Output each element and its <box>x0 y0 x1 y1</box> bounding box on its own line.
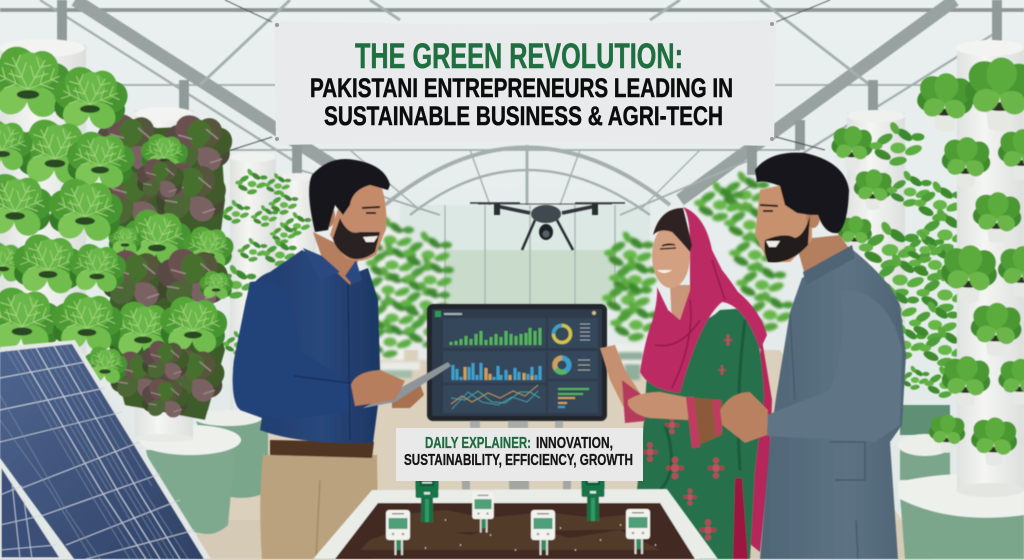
soil bed with sensors <box>313 472 718 559</box>
kurta <box>760 250 906 559</box>
sign: daily explainer: INNOVATION, <box>536 435 613 452</box>
neck <box>795 235 850 275</box>
beard <box>764 215 810 262</box>
hydroponic towers right <box>830 40 1024 559</box>
far greenhouse wall <box>400 205 650 305</box>
drone <box>470 203 625 250</box>
white sensor back <box>472 492 494 532</box>
roof frame <box>0 0 1024 215</box>
tower right <box>915 40 1024 497</box>
title banner <box>274 20 776 146</box>
hands with tablet <box>351 362 451 408</box>
planter small right <box>898 405 952 480</box>
tower right middle <box>830 110 932 343</box>
planter front <box>139 425 241 534</box>
sign: daily explainer <box>396 428 643 481</box>
lettuce <box>92 109 237 421</box>
scarf tail <box>745 340 772 552</box>
arms <box>600 345 722 448</box>
donut chart <box>548 318 598 348</box>
green sensor left <box>416 473 438 522</box>
white sensor one <box>386 510 410 555</box>
planter back <box>194 410 268 498</box>
hands <box>720 392 768 443</box>
green sensor right <box>582 472 604 521</box>
line chart <box>443 385 546 413</box>
climbing plants <box>859 180 971 399</box>
dress <box>637 308 764 559</box>
face <box>330 178 386 261</box>
belt <box>270 440 374 458</box>
neck <box>313 232 360 285</box>
neck <box>670 285 692 325</box>
tablet dashboard <box>427 304 607 428</box>
white planter frame <box>313 489 718 559</box>
second solar panel <box>0 463 62 559</box>
hair <box>653 208 692 252</box>
main solar panel <box>0 340 211 559</box>
collar <box>303 248 362 284</box>
banner heading: THE GREEN REVOLUTION: <box>355 37 683 76</box>
face <box>755 183 812 262</box>
soil <box>335 503 695 559</box>
bar chart: blue and orange <box>443 351 546 383</box>
tower three <box>214 152 311 410</box>
banner subheading <box>310 73 733 131</box>
tower one with green lettuce <box>0 39 139 386</box>
sign: daily explainer: DAILY EXPLAINER: <box>425 435 531 452</box>
floor <box>190 350 930 559</box>
beard <box>333 218 380 259</box>
sign legs <box>462 480 571 490</box>
eyes <box>760 205 778 211</box>
white sensor two <box>531 510 555 555</box>
dashboard header <box>435 311 441 317</box>
face <box>652 224 690 288</box>
horizontal bars <box>548 381 598 413</box>
shirt <box>233 250 380 443</box>
person: right man <box>720 153 906 559</box>
small far tower <box>280 173 316 365</box>
tablet stand <box>470 420 563 428</box>
bar chart: green <box>443 318 546 348</box>
tower two with dark lettuce <box>92 107 237 442</box>
bottom planter <box>898 474 1024 559</box>
scarf <box>640 207 767 393</box>
hair <box>309 159 390 232</box>
hydroponic towers left <box>0 39 316 534</box>
solar panels <box>0 340 211 559</box>
person: left man <box>233 159 451 559</box>
eyes <box>362 207 380 213</box>
back plant rows <box>362 170 794 380</box>
banner subheading: PAKISTANI ENTREPRENEURS LEADING IN <box>310 73 733 103</box>
person: woman in pink scarf <box>600 207 772 559</box>
collar <box>803 245 855 285</box>
hair <box>755 153 849 233</box>
donut chart two <box>548 351 598 379</box>
trousers <box>260 455 378 559</box>
sign: daily explainer: SUSTAINABILITY, EFFICIENCY, GROWTH <box>404 452 633 469</box>
banner subheading: SUSTAINABLE BUSINESS & AGRI-TECH <box>324 101 723 131</box>
white sensor three <box>626 509 650 554</box>
